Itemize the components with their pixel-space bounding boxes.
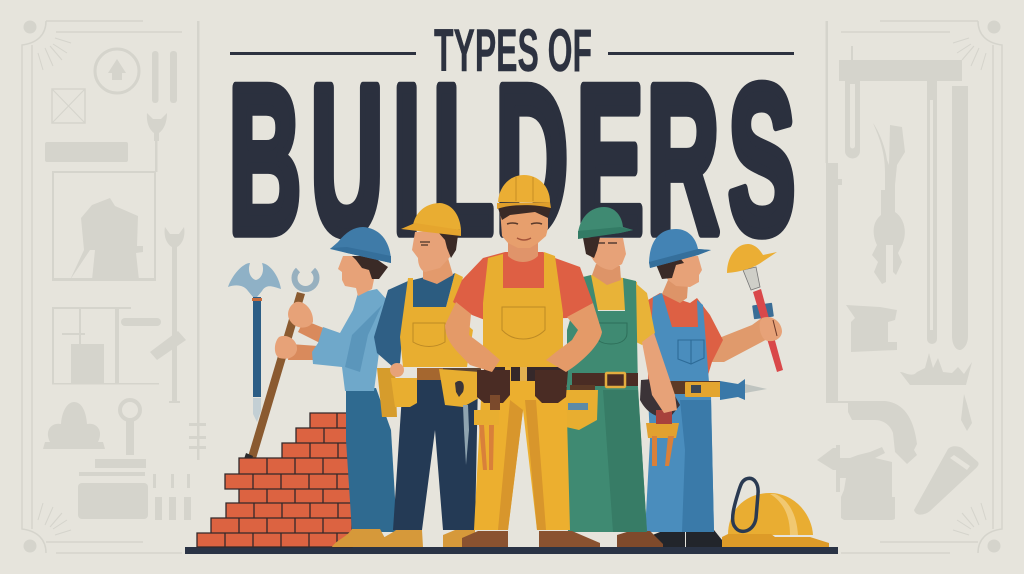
face (500, 209, 548, 248)
heading: TYPES OF (230, 17, 794, 84)
builder 3: centre, yellow helmet, red shirt, yellow bib (445, 175, 602, 547)
heading: TYPES OF: TYPES OF (434, 17, 592, 84)
face (586, 238, 626, 270)
heading: BUILDERS: BUILDERS (228, 42, 795, 277)
panel: left faded tool decoration (22, 20, 206, 553)
profile face (338, 256, 376, 296)
ground line (185, 547, 838, 554)
icon: red tool with hard hat (727, 244, 783, 372)
icon: hook tool (228, 263, 281, 422)
bricks (197, 413, 352, 547)
builder 2: yellow helmet, navy shirt, yellow apron (372, 203, 481, 547)
face (660, 256, 702, 287)
neck (508, 240, 538, 262)
builder 4: green helmet, yellow shirt, green overalls (566, 207, 677, 547)
face (412, 230, 455, 272)
icon: wrench carried by builder (243, 270, 316, 465)
panel: right faded tool decoration (817, 20, 1002, 553)
builder 1: blue helmet, light blue shirt (275, 227, 397, 547)
icon: hard hat and carabiner on ground (722, 478, 829, 547)
builder 5: blue helmet, blue overalls, red tool (640, 229, 775, 547)
